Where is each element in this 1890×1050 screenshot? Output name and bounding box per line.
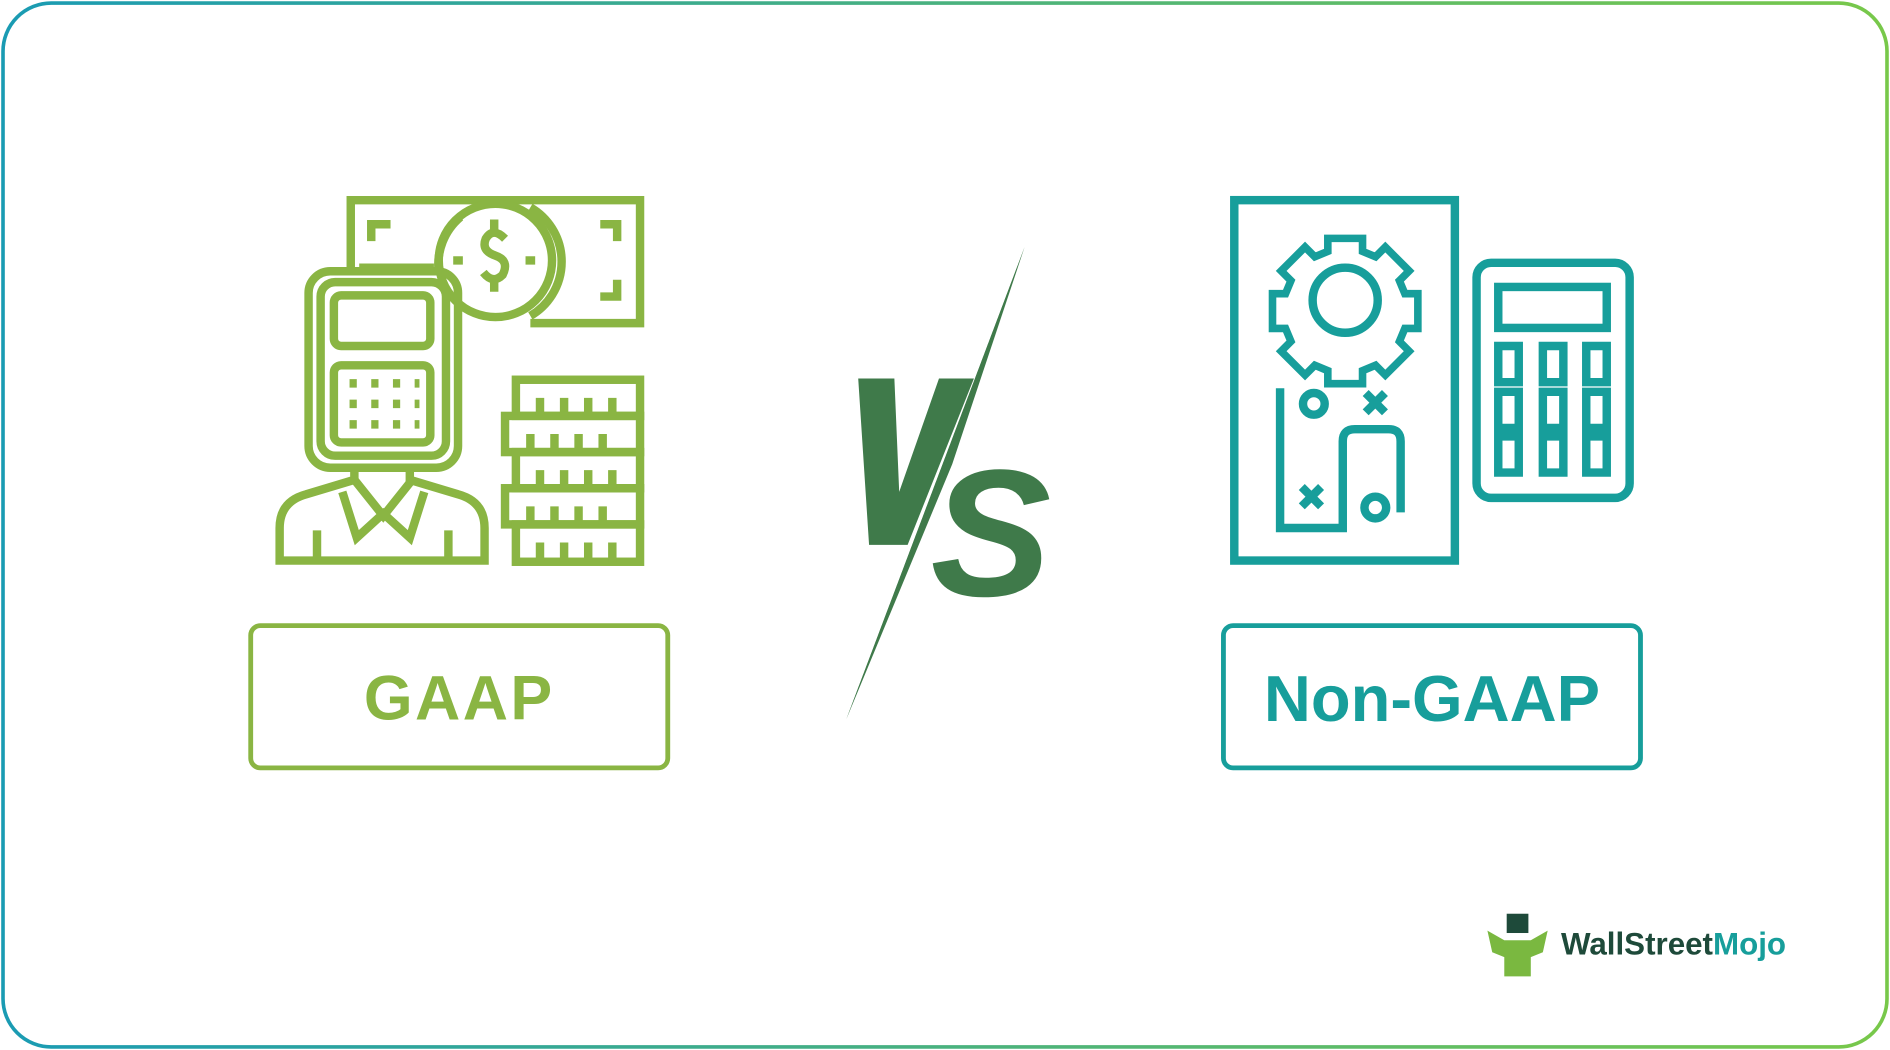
coin stacks [505, 380, 640, 562]
logo: WallStreetMojo: WallStreetMojo [1561, 927, 1786, 962]
bill [351, 200, 640, 323]
label: GAAP [251, 626, 668, 768]
VS graphic: S [931, 433, 1051, 635]
logo: WallStreetMojo [1487, 914, 1786, 976]
label: Non-GAAP: Non-GAAP [1264, 662, 1600, 735]
person with calculator [280, 271, 485, 561]
label: GAAP: GAAP [364, 664, 555, 734]
icon: Non-GAAP strategy and calculator [1234, 200, 1630, 561]
label: Non-GAAP [1223, 626, 1640, 768]
icon: GAAP accountant with money [280, 200, 640, 562]
VS graphic [846, 247, 1051, 720]
